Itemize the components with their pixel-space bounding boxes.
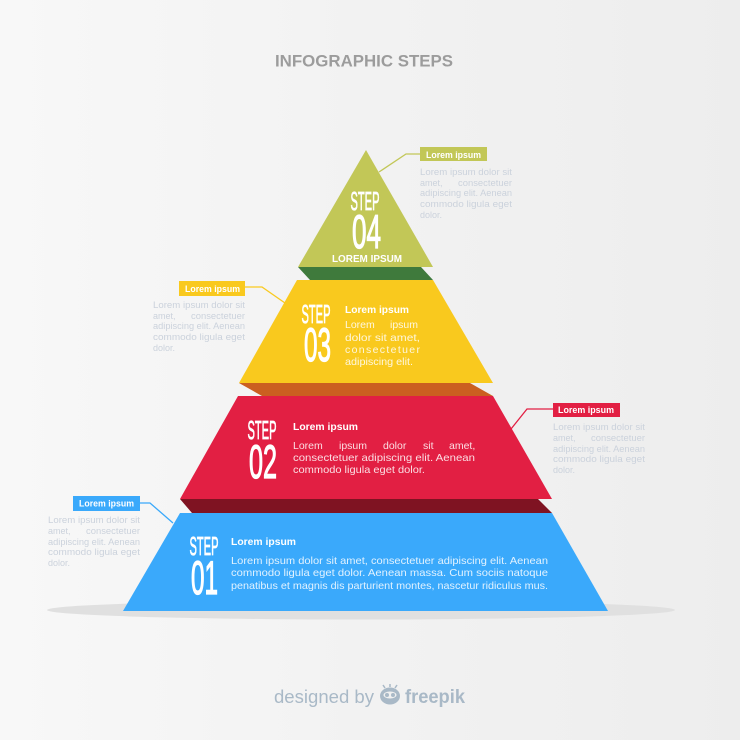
callout: step 04: dolor. <box>420 210 442 220</box>
icon: freepik mascot <box>380 684 400 704</box>
step 01 label: 01 <box>191 551 218 604</box>
step 04 label <box>350 186 381 258</box>
pyramid tier 1: blue: STEP <box>190 531 218 561</box>
step 01 text: Lorem ipsum dolor sit amet, consectetuer adipiscing elit. Aenean <box>231 555 548 567</box>
step 03 text: ipsum <box>390 319 418 331</box>
step 03 label <box>302 299 331 371</box>
callout: step 01 <box>48 496 173 568</box>
step 02 label: 02 <box>249 435 277 488</box>
step 03 text: consectetuer <box>345 344 420 356</box>
callout: step 01: Lorem ipsum <box>79 498 134 508</box>
pyramid tier 2: red: STEP <box>248 415 276 445</box>
step 02 text: amet, <box>449 440 475 452</box>
callout: step 01: dolor. <box>48 558 70 568</box>
step 02 text: commodo ligula eget dolor. <box>293 464 425 476</box>
step 03 text: Lorem <box>345 319 375 331</box>
pyramid tier 2: red <box>180 383 552 499</box>
callout: step 03 <box>153 281 285 353</box>
callout: step 02: consectetuer <box>591 433 645 443</box>
callout: step 01: adipiscing elit. Aenean <box>48 537 140 547</box>
step 03 label: 03 <box>304 318 331 371</box>
step 03 text: Lorem ipsum <box>345 304 409 316</box>
step 02 label <box>248 415 277 488</box>
callout: step 04: consectetuer <box>458 178 512 188</box>
step 04 caption: LOREM IPSUM <box>332 253 402 265</box>
step 04 label: 04 <box>352 205 381 258</box>
callout: step 03: dolor. <box>153 343 175 353</box>
callout: step 03: adipiscing elit. Aenean <box>153 321 245 331</box>
callout: step 01: amet, <box>48 526 71 536</box>
footer: designed by freepik: freepik <box>405 687 465 708</box>
callout: step 02: Lorem ipsum <box>558 405 614 415</box>
callout: step 04: amet, <box>420 178 443 188</box>
step 02 text: dolor <box>383 440 407 452</box>
callout: step 02: commodo ligula eget <box>553 454 646 464</box>
callout: step 02: adipiscing elit. Aenean <box>553 444 645 454</box>
step 01 text: penatibus et magnis dis parturient montes, nascetur ridiculus mus. <box>231 580 548 592</box>
callout: step 04: Lorem ipsum <box>426 150 481 160</box>
step 02 text: ipsum <box>339 440 367 452</box>
callout: step 03: Lorem ipsum <box>185 284 240 294</box>
callout: step 02: Lorem ipsum dolor sit <box>553 422 646 432</box>
callout: step 03: consectetuer <box>191 311 245 321</box>
step 02 text <box>293 421 475 476</box>
callout: step 04: commodo ligula eget <box>420 199 513 209</box>
title: INFOGRAPHIC STEPS <box>275 52 453 70</box>
step 02 text: Lorem <box>293 440 323 452</box>
pyramid tier 1: blue <box>123 499 608 611</box>
pyramid tier 3: yellow <box>239 267 493 383</box>
step 01 text: Lorem ipsum <box>231 536 296 548</box>
pyramid tier 4: green triangle: STEP <box>350 186 380 216</box>
footer: designed by freepik: designed by <box>274 687 374 707</box>
callout: step 03: commodo ligula eget <box>153 332 246 342</box>
callout: step 04: adipiscing elit. Aenean <box>420 188 512 198</box>
step 03 text: adipiscing elit. <box>345 356 413 368</box>
callout: step 04: Lorem ipsum dolor sit <box>420 167 513 177</box>
step 03 text <box>345 304 420 368</box>
step 02 text: sit <box>423 440 434 452</box>
callout: step 03: amet, <box>153 311 176 321</box>
callout: step 03: Lorem ipsum dolor sit <box>153 300 246 310</box>
callout: step 02: amet, <box>553 433 576 443</box>
ground shadow <box>47 600 675 620</box>
callout: step 01: commodo ligula eget <box>48 547 141 557</box>
callout: step 01: Lorem ipsum dolor sit <box>48 515 141 525</box>
footer: designed by freepik <box>274 684 465 708</box>
callout: step 04 <box>379 147 513 220</box>
callout: step 02: dolor. <box>553 465 575 475</box>
pyramid tier 4: green triangle <box>298 150 433 267</box>
step 01 text: commodo ligula eget dolor. Aenean massa. Cum sociis natoque <box>231 567 548 579</box>
callout: step 02 <box>511 403 646 475</box>
step 02 text: Lorem ipsum <box>293 421 358 433</box>
step 01 text <box>231 536 548 592</box>
step 02 text: consectetuer adipiscing elit. Aenean <box>293 452 475 464</box>
step 03 text: dolor sit amet, <box>345 332 420 344</box>
callout: step 01: consectetuer <box>86 526 140 536</box>
step 01 label <box>190 531 218 604</box>
pyramid tier 3: yellow: STEP <box>302 299 330 329</box>
